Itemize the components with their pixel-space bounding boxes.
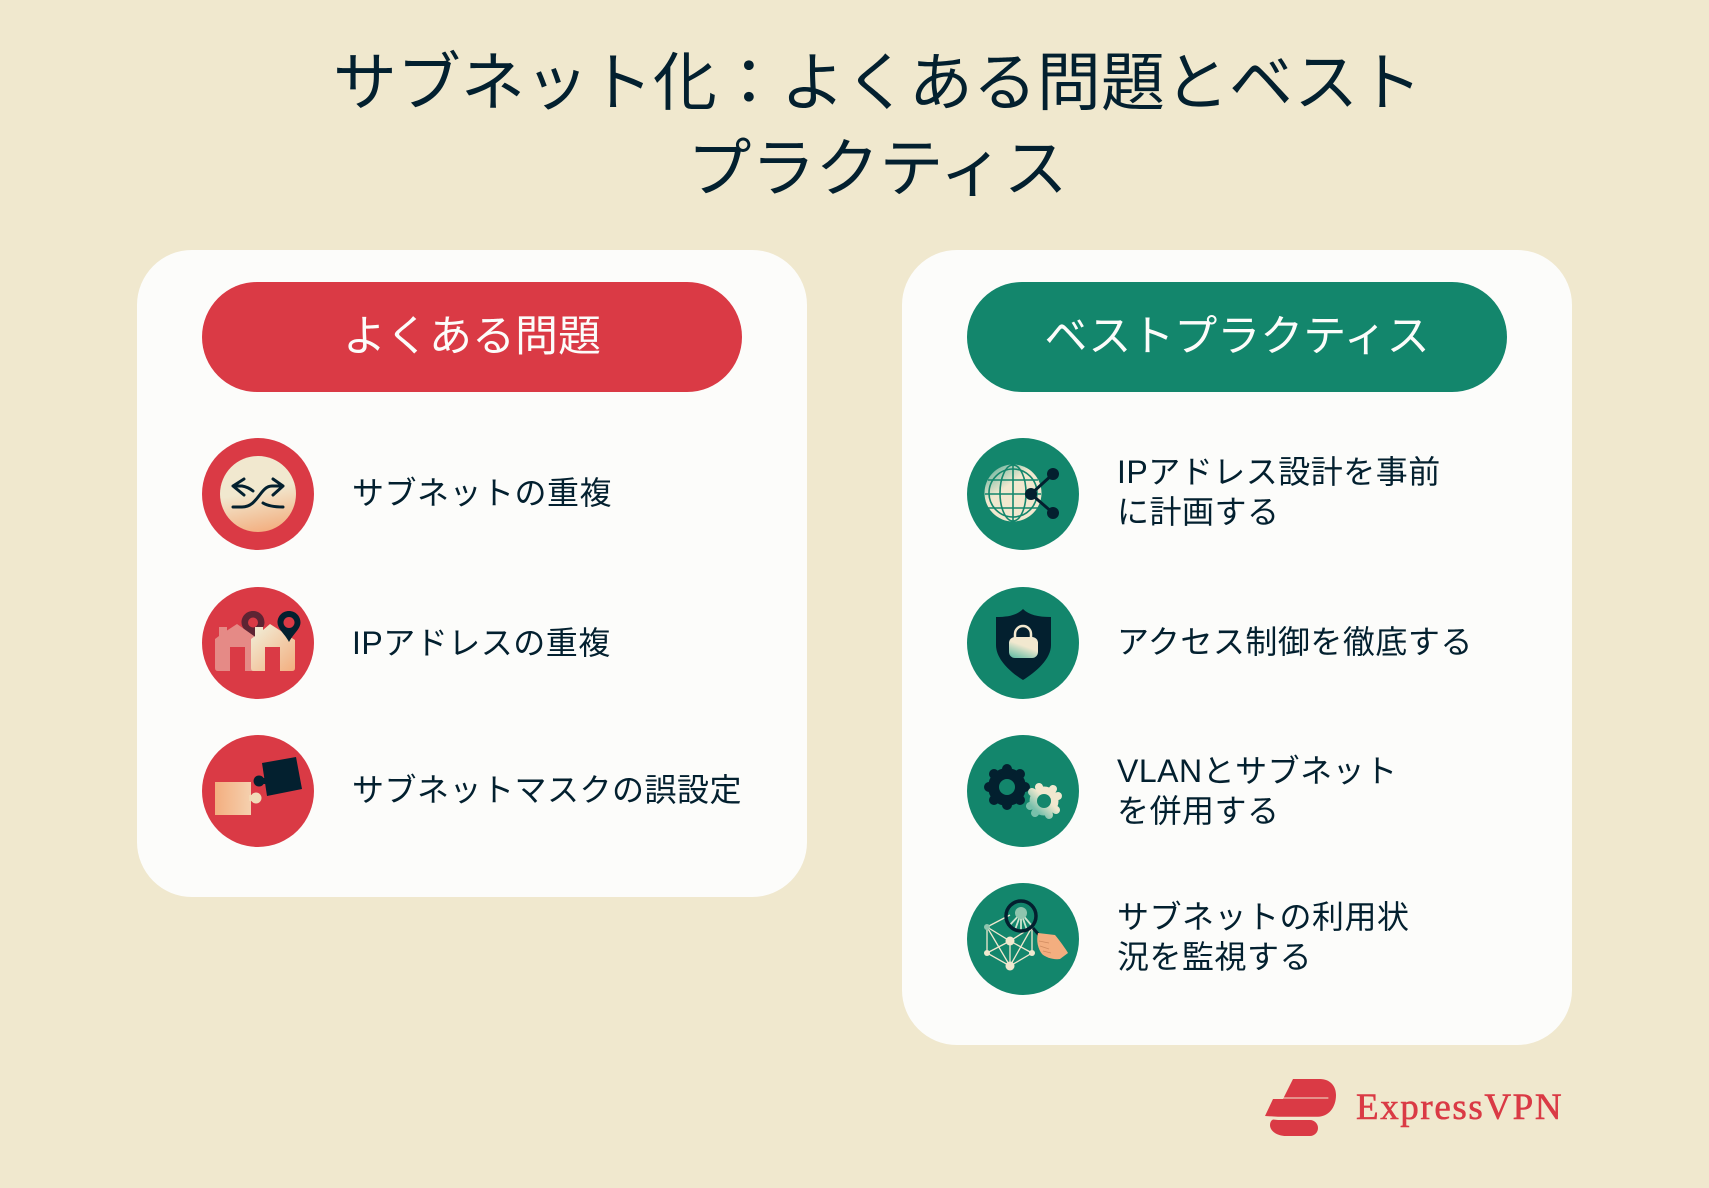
text: subnet overlap: サブネットの重複 xyxy=(352,475,612,511)
panel: common problems xyxy=(137,250,807,897)
text: monitor usage xyxy=(1117,899,1410,975)
text: VLAN with subnets: を併用する xyxy=(1117,793,1280,829)
text: access control: アクセス制御を徹底する xyxy=(1117,624,1473,660)
text: plan IP addressing: に計画する xyxy=(1117,494,1280,530)
text: monitor usage: サブネットの利用状 xyxy=(1117,899,1410,935)
text: monitor usage: 況を監視する xyxy=(1117,939,1312,975)
title: サブネット化：よくある問題とベスト xyxy=(333,47,1422,119)
text: VLAN with subnets: VLANとサブネット xyxy=(1117,753,1398,789)
icon: network monitoring xyxy=(967,883,1079,995)
heading: best practices: ベストプラクティス xyxy=(1044,313,1430,361)
panel: best practices xyxy=(902,250,1572,1045)
title xyxy=(333,47,1422,205)
text: plan IP addressing xyxy=(1117,454,1441,530)
text: IP address conflict: IPアドレスの重複 xyxy=(352,625,611,661)
icon: subnet overlap xyxy=(202,438,314,550)
text: wrong subnet mask: サブネットマスクの誤設定 xyxy=(352,772,742,808)
title: プラクティス xyxy=(687,133,1068,205)
logo: ExpressVPN xyxy=(1265,1079,1563,1136)
heading: common problems: よくある問題 xyxy=(343,313,601,361)
logo: ExpressVPN: ExpressVPN xyxy=(1356,1087,1563,1128)
text: plan IP addressing: IPアドレス設計を事前 xyxy=(1117,454,1441,490)
icon: IP address conflict xyxy=(202,587,314,699)
icon: globe network xyxy=(967,438,1079,550)
text: VLAN with subnets xyxy=(1117,753,1398,829)
icon: shield lock xyxy=(967,587,1079,699)
heading: common problems xyxy=(202,282,742,392)
icon: wrong subnet mask xyxy=(202,735,314,847)
icon: gears xyxy=(967,735,1079,847)
heading: best practices xyxy=(967,282,1507,392)
